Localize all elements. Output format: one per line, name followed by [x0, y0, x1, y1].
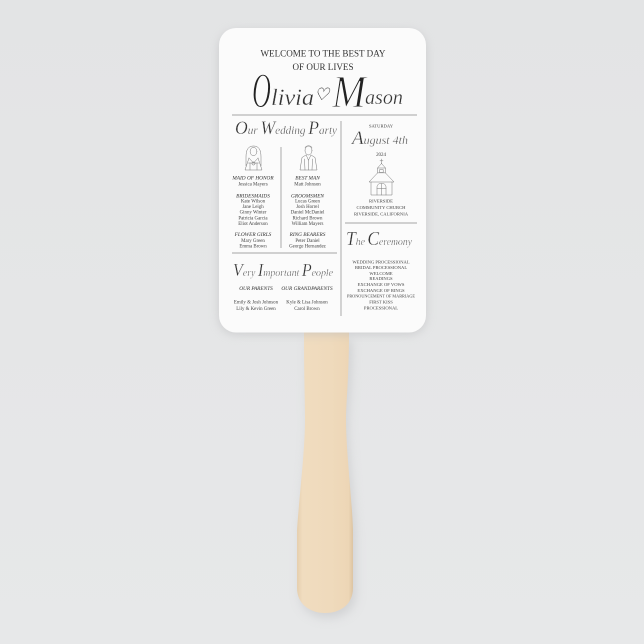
column: groom side: William Mayers — [292, 222, 323, 227]
heading: very important people: Very Important People — [233, 260, 333, 280]
column: bride side — [231, 176, 274, 250]
panel: wedding party — [231, 118, 338, 250]
column: bride side: Patricia Garcia — [238, 216, 268, 221]
column: groom side: George Hernandez — [289, 245, 327, 250]
icon: church — [369, 159, 394, 195]
column: groom side: Lucas Green — [295, 200, 320, 204]
text: order of service: EXCHANGE OF VOWS — [358, 282, 405, 287]
panel: very important people — [233, 260, 333, 312]
wooden handle — [297, 330, 356, 618]
column: bride side: BRIDESMAIDS — [236, 194, 270, 200]
column: groom side: Matt Johnson — [294, 182, 321, 188]
text: venue: COMMUNITY CHURCH — [357, 205, 406, 210]
title: couple names: M — [331, 66, 368, 117]
column: bride side: Mary Green — [241, 239, 265, 244]
text: our parents — [234, 286, 279, 312]
text: order of service: FIRST KISS — [369, 300, 393, 304]
text: our parents: Lily & Kevin Green — [236, 307, 276, 312]
heading: the ceremony: The Ceremony — [346, 228, 412, 250]
panel: the ceremony — [346, 228, 415, 310]
text: our grandparents — [281, 286, 333, 312]
column: bride side: Eliot Anderson — [238, 222, 268, 227]
text: venue: RIVERSIDE, CALIFORNIA — [354, 212, 409, 218]
text: order of service: BRIDAL PROCESSIONAL — [355, 265, 407, 270]
column: bride side: MAID OF HONOR — [231, 176, 274, 182]
text: our grandparents: OUR GRANDPARENTS — [281, 286, 333, 292]
text: order of service: EXCHANGE OF RINGS — [357, 288, 405, 293]
text: order of service: WEDDING PROCESSIONAL — [352, 260, 410, 264]
text: order of service — [347, 260, 415, 310]
title: couple names: ason — [365, 85, 403, 109]
heading: date: August 4th — [350, 128, 408, 149]
text: venue: RIVERSIDE — [369, 198, 393, 204]
text: venue — [354, 198, 409, 218]
icon: bride — [245, 146, 262, 170]
heading: welcome: OF OUR LIVES — [292, 63, 354, 73]
column: bride side: Jessica Mayers — [238, 182, 268, 188]
icon: groom — [300, 146, 317, 170]
heading: welcome — [260, 50, 386, 73]
text: order of service: PROCESSIONAL — [364, 306, 398, 310]
fan card — [219, 28, 426, 334]
text: our grandparents: Kyle & Lisa Johnson — [286, 300, 328, 306]
column: bride side: FLOWER GIRLS — [234, 232, 272, 238]
column: bride side: Jane Leigh — [242, 205, 264, 210]
column: bride side: Emma Brown — [239, 245, 267, 250]
title: couple names: O — [252, 62, 271, 118]
heading: our wedding party: Our Wedding Party — [235, 118, 338, 139]
text: order of service: WELCOME — [369, 271, 393, 276]
text: order of service: READINGS — [369, 276, 393, 281]
text: order of service: PRONOUNCEMENT OF MARRIAGE — [347, 294, 415, 298]
text: our parents: Emily & Josh Johnson — [234, 300, 279, 306]
heading: welcome: WELCOME TO THE BEST DAY — [260, 50, 386, 60]
title: couple names: ♡ — [314, 85, 331, 104]
panel: date and venue — [350, 124, 409, 218]
text: our grandparents: Carol Brown — [294, 307, 320, 312]
text: year: 2024 — [376, 153, 386, 158]
column: bride side: Ginny Winter — [240, 211, 267, 216]
column: groom side: Josh Horrel — [296, 205, 319, 210]
title: couple names — [252, 62, 403, 118]
column: groom side: Daniel McDaniel — [291, 211, 325, 216]
text: our parents: OUR PARENTS — [239, 286, 273, 292]
column: groom side: Peter Daniel — [295, 239, 320, 244]
column: groom side: GROOMSMEN — [291, 194, 324, 200]
text: saturday: SATURDAY — [369, 124, 394, 128]
column: bride side: Kate Wilson — [241, 200, 266, 204]
column: groom side: RING BEARERS — [289, 232, 326, 238]
title: couple names: livia — [271, 85, 314, 110]
column: groom side — [289, 176, 327, 250]
column: groom side: BEST MAN — [295, 176, 320, 182]
column: groom side: Richard Brown — [292, 216, 323, 221]
